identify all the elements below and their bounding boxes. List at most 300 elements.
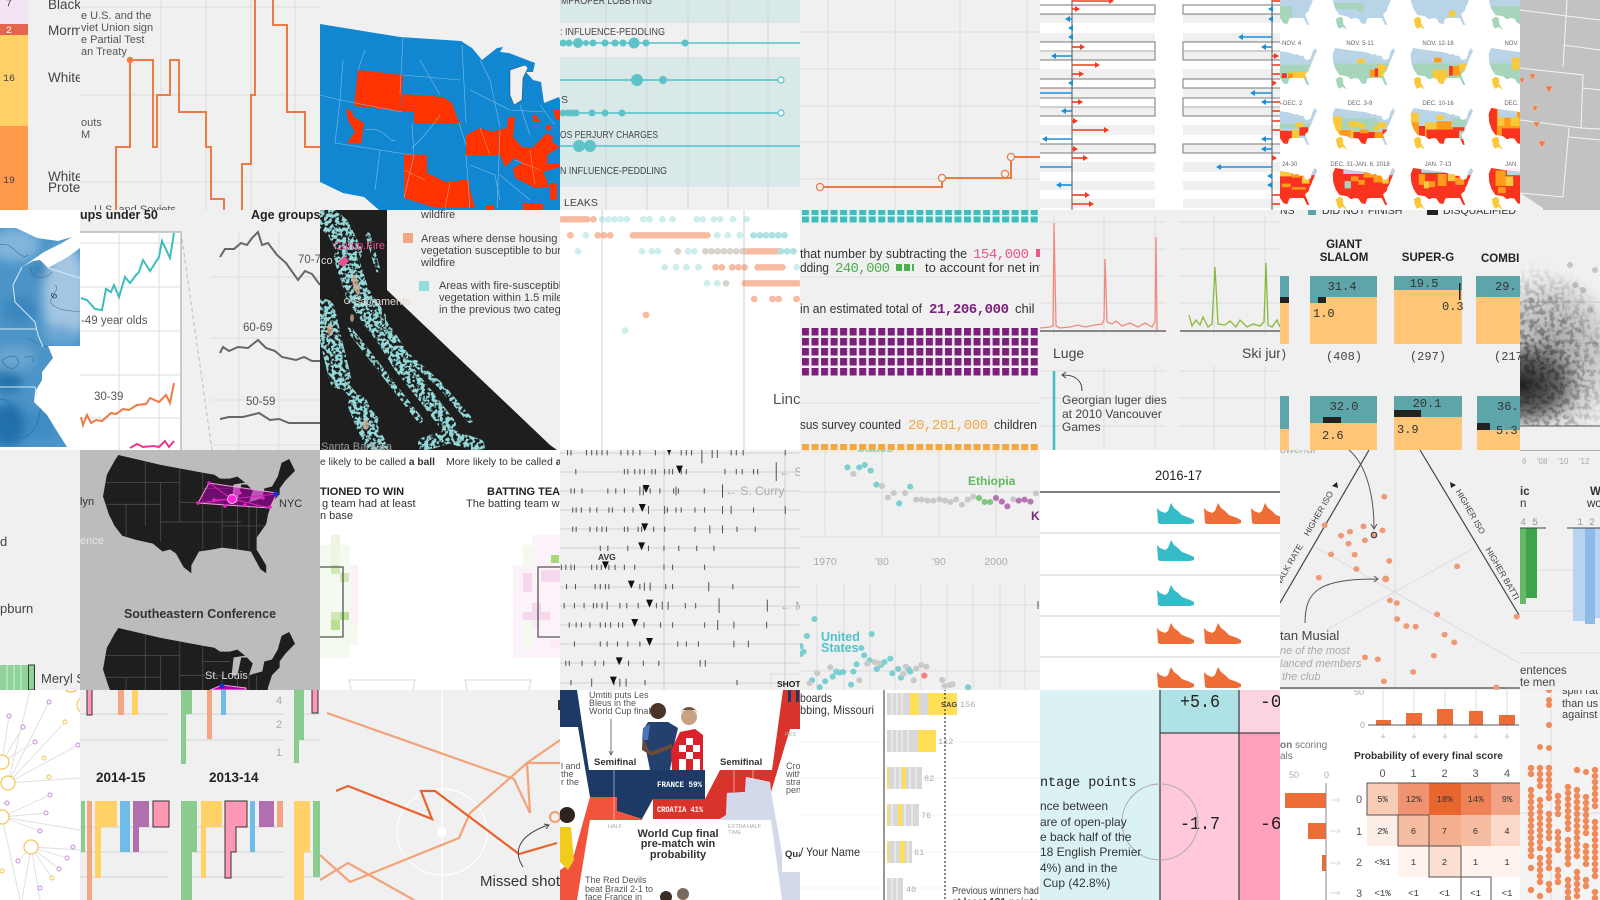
week labels: NOV. 1: [1504, 41, 1524, 47]
panel: luge and ski jump search peaks: [1040, 210, 1288, 450]
dark pass line: [336, 786, 557, 854]
average label: AVG: [598, 552, 616, 562]
map labels: [80, 496, 302, 547]
legend: DID NOT FINISH: [1322, 205, 1402, 217]
annotation arrow: [609, 719, 613, 755]
week labels: JAN. 7-13: [1425, 162, 1452, 168]
arrows: [1305, 450, 1520, 688]
column headings: COMBI: [1481, 253, 1519, 265]
stan musial annotation: owerful: [1280, 444, 1316, 456]
legend: vegetation within 1.5 miles: [439, 292, 569, 304]
panel: soccer passing chart: [320, 690, 566, 900]
subtract and add text: in an estimated total of: [800, 301, 922, 316]
panel: unit square counts: [800, 210, 1050, 450]
scale digits: 4 5: [1520, 518, 1538, 529]
subtract and add text: to account for net inte: [925, 260, 1050, 275]
names: pburn: [0, 601, 33, 616]
week labels: [1277, 41, 1524, 168]
left labels: als: [1280, 751, 1293, 762]
highlighted player: [1371, 532, 1377, 538]
map labels: NYC: [279, 498, 302, 510]
line labels: -49 year olds: [81, 315, 148, 327]
purple nodes: [5, 700, 80, 890]
orange squares: [802, 444, 1040, 450]
subtract and add text: dding: [800, 260, 829, 275]
square values: 1.0: [1313, 307, 1335, 321]
panel: orange step chart: [800, 0, 1040, 210]
green bars: [1520, 528, 1537, 604]
square values: 31.4: [1328, 280, 1356, 294]
line 60-69: [220, 340, 320, 361]
headings: More likely to be called a s: [446, 456, 570, 468]
highlighted numbers: 21,206,000: [929, 302, 1009, 318]
right tick: [1037, 601, 1039, 609]
annotation: Georgian luger dies: [1062, 393, 1167, 407]
ski jump line: [1189, 263, 1280, 327]
table rules: [1040, 491, 1280, 493]
highlighted numbers: 20,201,000: [908, 418, 988, 434]
text: against: [1562, 709, 1597, 721]
panel: gray western map: [1520, 0, 1600, 210]
text: spin rat: [1562, 685, 1598, 697]
year axis: '10: [1558, 457, 1569, 466]
week labels: DEC. 3-9: [1348, 101, 1373, 107]
cell values: <1: [1470, 889, 1481, 899]
shot arrow: [518, 824, 549, 867]
week labels: . 24-30: [1279, 162, 1298, 168]
column headers: 2: [1441, 768, 1448, 780]
cell values: 2%: [1377, 827, 1388, 837]
player labels: ← S. Curry: [725, 484, 784, 498]
panel: diverging arrows: [1040, 0, 1280, 210]
shot legend: [771, 674, 801, 690]
headings: [1520, 486, 1600, 510]
state borders: [0, 267, 80, 395]
upper labels: [857, 441, 1040, 523]
year axis: '12: [1579, 457, 1590, 466]
map labels: Santa Barbara: [321, 441, 393, 453]
win probabilities: FRANCE 59%: [657, 781, 702, 790]
state borders: [1520, 0, 1600, 197]
panel: shot distance tick plot: [560, 450, 820, 690]
axis labels: WALK RATE: [1272, 542, 1305, 589]
table cells: [1160, 690, 1280, 900]
cell values: 1: [1411, 858, 1416, 868]
light pass lines: [320, 713, 560, 900]
scale numbers: [276, 695, 282, 759]
triangle markers: [1519, 74, 1553, 148]
week labels: 9-NOV. 4: [1277, 41, 1302, 47]
text: [1562, 685, 1599, 721]
big ten network: [196, 481, 279, 509]
axis labels: HIGHER ISO: [1302, 489, 1335, 538]
heading: ntage points: [1040, 776, 1136, 791]
panel: triangular batter scatter: [1272, 444, 1522, 690]
player labels: [725, 465, 820, 613]
bar labels: [48, 0, 87, 195]
left bars: [1285, 793, 1326, 871]
table values: [1180, 693, 1282, 835]
sport labels: [1053, 345, 1288, 361]
fire marker: [338, 256, 349, 267]
cell values: <1: [1439, 889, 1450, 899]
upper dots: [844, 462, 1039, 509]
side annotations: with: [785, 769, 802, 779]
time ticks: TIME: [728, 830, 741, 836]
bar separators: [892, 693, 916, 900]
panel: points bars with threshold: [800, 690, 1040, 900]
row 4 sneakers: [1157, 623, 1241, 644]
annotation: U.S. and Soviets: [94, 204, 176, 216]
map row 3: [1280, 108, 1520, 150]
row headers: 0: [1356, 794, 1362, 806]
time ticks: HALF: [608, 824, 623, 830]
row 1 sneakers: [1157, 503, 1288, 524]
labels: Missed shot: [480, 873, 561, 890]
network spokes: [2, 690, 80, 900]
bar values: 19: [3, 176, 15, 187]
lake michigan: [510, 65, 528, 105]
line labels: 30-39: [94, 391, 123, 403]
caption: [1520, 665, 1567, 689]
table values: -0: [1260, 693, 1282, 713]
headings: g team had at least: [322, 498, 416, 510]
pitch markings: [397, 690, 487, 900]
bar labels: White: [48, 70, 83, 85]
chart title: World Cup final: [637, 828, 719, 840]
home plates: [349, 680, 531, 690]
white chart panel: [80, 232, 181, 450]
square values: [1313, 277, 1519, 443]
stan musial annotation: lanced members: [1280, 658, 1362, 670]
bar values: 2: [6, 26, 12, 37]
season titles: 2013-14: [209, 770, 259, 785]
sport labels: Ski jum: [1242, 345, 1288, 361]
line labels: [81, 254, 321, 408]
stage labels: Qua: [785, 849, 804, 860]
stage labels: Semifinal: [594, 757, 636, 768]
vegetation speckles: [322, 214, 478, 448]
subtract and add text: [800, 246, 1050, 432]
map shape with shading: [0, 228, 80, 447]
bar labels: Protes: [48, 180, 87, 195]
map labels: [321, 240, 411, 453]
player labels: ← S.: [779, 465, 806, 479]
united states label: [821, 630, 860, 655]
side annotations: beat Brazil 2-1 to: [585, 884, 653, 894]
cell values: 6: [1473, 827, 1478, 837]
axis: [883, 689, 885, 900]
panel: conference black maps: [80, 450, 320, 690]
table values: -6: [1260, 815, 1282, 835]
chart headings: Age groups u: [251, 208, 332, 222]
player croatia: [671, 707, 703, 770]
body text: nce between: [1040, 799, 1108, 813]
player dots: [1316, 494, 1520, 690]
axis baselines: [1040, 330, 1280, 332]
green bars: [0, 665, 35, 690]
red districts: [346, 70, 560, 210]
upper bars: [87, 688, 318, 764]
column headers: 1: [1410, 768, 1417, 780]
square values: 36.: [1497, 400, 1519, 414]
stan musial annotation: tan Musial: [1280, 628, 1339, 643]
body text: are of open-play: [1040, 815, 1127, 829]
year labels: [813, 556, 1008, 568]
side annotations: Cro: [786, 761, 801, 771]
panel: marathon country dot chart: [800, 441, 1040, 690]
chart headings: [80, 208, 332, 222]
annotation top: Umtiti puts Les: [589, 690, 649, 700]
panel: red and blue district map: [320, 0, 560, 210]
text: than us: [1562, 698, 1599, 710]
sample sizes: (297): [1410, 350, 1446, 364]
legend: vegetation susceptible to burn: [421, 245, 567, 257]
subtract and add text: sus survey counted: [800, 417, 901, 432]
panel: step chart: [80, 0, 320, 216]
lower bars 2014-15: [81, 801, 169, 900]
upper labels: Ethiopia: [968, 474, 1016, 488]
bar values: 112: [938, 737, 953, 747]
stage labels: [594, 757, 804, 860]
map labels: Sacramento: [353, 296, 411, 308]
player france: [642, 703, 678, 770]
top axis: 50: [1354, 687, 1364, 697]
lower dots: [798, 616, 971, 690]
yellow nodes: [0, 720, 67, 880]
subtract and add text: that number by subtracting the: [800, 246, 967, 261]
stan musial annotation: [1280, 444, 1362, 683]
table values: +5.6: [1180, 693, 1220, 713]
column headers: 0: [1379, 768, 1386, 780]
legend: Areas with fire-susceptible: [439, 280, 567, 292]
map labels: co: [321, 255, 333, 267]
chart title: probability: [650, 849, 707, 861]
legend: [1280, 205, 1516, 217]
line labels: 60-69: [243, 322, 272, 334]
week labels: NOV. 12-18: [1422, 41, 1454, 47]
city marker: [344, 298, 350, 304]
white label backing: [782, 850, 800, 872]
scatter points: [1527, 262, 1598, 348]
row labels: /: [800, 845, 804, 859]
left heat map: [320, 535, 358, 658]
annotation: at 2010 Vancouver: [1062, 407, 1162, 421]
panel: stacked religion bar: [0, 0, 87, 210]
highlighted numbers: 240,000: [835, 261, 890, 277]
bar values: 76: [921, 811, 931, 821]
chart headings: ups under 50: [80, 208, 158, 222]
annotation: [81, 10, 176, 216]
annotation: outs: [81, 117, 102, 129]
top navy marks: [788, 689, 799, 702]
cell values: 18%: [1436, 795, 1453, 805]
chart title: [637, 828, 719, 861]
year labels: '90: [932, 556, 946, 568]
square values: 2.6: [1322, 429, 1344, 443]
row labels: Your Name: [806, 845, 860, 859]
panel: alpine ski result squares: [1280, 205, 1523, 450]
cell values: 5%: [1377, 795, 1388, 805]
white separators: [614, 770, 753, 820]
body text: e back half of the: [1040, 830, 1132, 844]
line labels: 50-59: [246, 396, 275, 408]
top axis: [1354, 687, 1365, 730]
square values: 32.0: [1330, 400, 1358, 414]
win probabilities: [657, 781, 703, 815]
panel: California wildfire map: [320, 209, 585, 453]
curved arrow: [1062, 372, 1082, 391]
headings: [320, 456, 579, 522]
left labels: 50: [1289, 770, 1299, 780]
panel: radial network: [0, 690, 80, 900]
start dot: [127, 57, 133, 63]
panel: flu small-multiple maps: [1277, 0, 1524, 210]
bar values: 61: [914, 848, 924, 858]
sample sizes: (217: [1494, 350, 1523, 364]
square values: 3.9: [1397, 423, 1419, 437]
column headers: 4: [1504, 768, 1510, 780]
week labels: DEC. 31-JAN. 6, 2018: [1330, 162, 1390, 168]
opponent pale area: [720, 777, 800, 900]
conference title: Southeastern Conference: [124, 607, 276, 621]
bar labels: Morm: [48, 23, 82, 38]
timeline labels: : INFLUENCE-PEDDLING: [560, 26, 665, 38]
week labels: 6-DEC. 2: [1278, 101, 1303, 107]
legend: wildfire: [420, 209, 455, 221]
subtract and add text: children: [994, 417, 1037, 432]
body text: 18 English Premier: [1040, 845, 1141, 859]
column headers: 3: [1472, 768, 1479, 780]
timeline labels: [560, 0, 667, 209]
square values: 5.3: [1496, 424, 1518, 438]
player labels: ← M. E: [780, 599, 820, 613]
map labels: Camp.Fire: [334, 240, 385, 252]
year axis: '08: [1537, 457, 1548, 466]
side annotations: stra: [786, 777, 801, 787]
title: Probability of every final score: [1354, 750, 1503, 762]
names: Meryl S: [41, 671, 85, 686]
legend: wildfire: [420, 257, 455, 269]
panel: world cup win probability: [560, 690, 804, 900]
red arrows: [1072, 1, 1285, 204]
labels: L: [557, 697, 566, 714]
panel: blue climate map: [0, 228, 80, 447]
squares row 2: [1280, 396, 1520, 450]
rows of bars: [887, 693, 957, 900]
panel: orange dot columns: [1520, 685, 1600, 900]
map labels: lyn: [80, 496, 94, 508]
side annotations: r the: [561, 777, 579, 787]
mean triangles: [602, 447, 683, 685]
panel: dot strip chart: [560, 210, 801, 450]
yellow hubs: [0, 676, 93, 854]
timeline labels: LEAKS: [564, 197, 598, 209]
brazil red area: [560, 797, 642, 900]
win probabilities: CROATIA 41%: [657, 806, 703, 815]
lower-left background: [1520, 193, 1543, 210]
subtract and add text: chil: [1015, 301, 1035, 316]
top bar chart: [1376, 709, 1515, 725]
map labels: ence: [80, 535, 104, 547]
cell values: <%1: [1374, 858, 1391, 868]
step line: [116, 0, 320, 210]
upper US map: [103, 455, 295, 573]
panel: strike zone heat maps: [320, 456, 579, 690]
time ticks: HALF: [747, 824, 762, 830]
season titles: [96, 770, 259, 785]
cell values: 14%: [1467, 795, 1484, 805]
timeline lines: [560, 43, 800, 146]
side annotations: pen: [786, 785, 801, 795]
teal squares: [802, 209, 1040, 224]
labels: [480, 697, 566, 890]
annotation: M: [81, 129, 90, 141]
cell values: 2: [1442, 858, 1447, 868]
scatter density: [1520, 268, 1600, 426]
small unit icons: [896, 249, 1040, 271]
headings: BATTING TEAM F: [487, 486, 579, 498]
season heading: 2016-17: [1155, 467, 1202, 483]
map row 4: [1280, 168, 1520, 210]
bar values: [3, 0, 15, 187]
squares row 1: [1280, 276, 1520, 344]
lower network: [210, 683, 246, 690]
SAG label: SAG: [941, 700, 957, 709]
cell values: 4: [1504, 827, 1510, 837]
teal bands: [560, 0, 800, 187]
legend: NS: [1280, 205, 1295, 217]
cell values: <1: [1408, 889, 1419, 899]
cell values: <1: [1502, 889, 1512, 899]
scale numbers: 2: [276, 719, 282, 731]
stan musial annotation: ne of the most: [1280, 645, 1351, 657]
row labels: [800, 691, 874, 859]
sample sizes: [1280, 348, 1523, 364]
left labels: on scoring: [1280, 740, 1327, 751]
outlined rows: [1040, 5, 1280, 153]
croatia red area: [653, 690, 800, 819]
line 50-59: [220, 413, 320, 423]
panel: black dot scatter: [1520, 210, 1600, 450]
united states label: States: [821, 641, 859, 655]
square values: 29.: [1495, 280, 1517, 294]
square values: 0.3: [1442, 300, 1464, 314]
contour number: 6: [48, 291, 59, 301]
panel: sneaker pictogram table: [1040, 467, 1280, 688]
panel: percentage point table: [1040, 690, 1282, 900]
axis labels: HIGHER BATTI: [1484, 546, 1522, 601]
year axis: 6: [1522, 457, 1527, 466]
row headers: 1: [1356, 826, 1362, 838]
row labels: bbing, Missouri: [800, 703, 874, 717]
body text: 4%) and in the: [1040, 861, 1118, 875]
annotation: e Partial Test: [81, 34, 144, 46]
column headings: GIANT: [1326, 239, 1362, 251]
panel: histogram bars by season: [80, 690, 320, 900]
yellow segments: [887, 693, 957, 863]
legend: [403, 209, 585, 316]
upper stray dots: [1537, 687, 1589, 775]
scale numbers: 1: [276, 747, 282, 759]
square values: 20.1: [1413, 397, 1441, 411]
row headers: 2: [1356, 857, 1362, 869]
diagonal outlines: [1367, 783, 1520, 900]
annotation top: World Cup final.: [589, 706, 653, 716]
scale digits: [1520, 518, 1595, 529]
annotation: e U.S. and the: [81, 10, 151, 22]
shot legend: SHOT: [777, 679, 801, 689]
